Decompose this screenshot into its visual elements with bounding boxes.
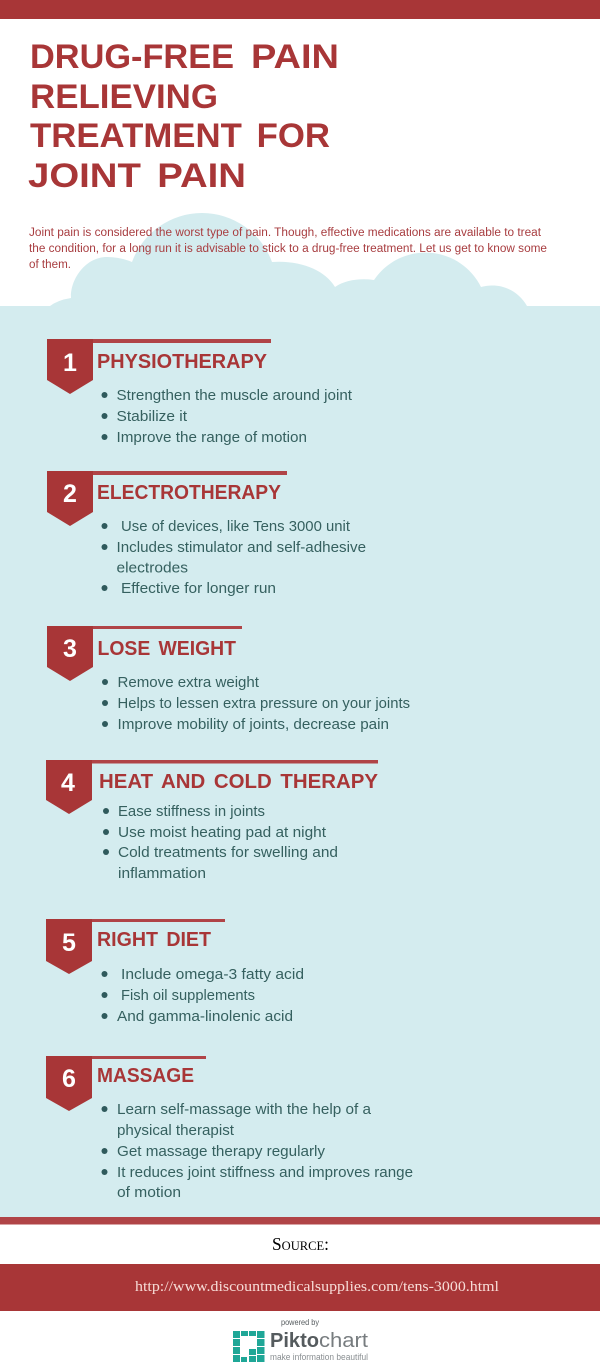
bullet list 4: [103, 803, 338, 882]
source label: Source:: [272, 1234, 329, 1254]
bullet list 4: Ease stiffness in joints: [118, 803, 265, 820]
number ribbon 6: [46, 1056, 92, 1111]
bullet list 2: Use of devices, like Tens 3000 unit: [121, 518, 351, 535]
number ribbon 4: 4: [61, 769, 75, 797]
bullet list 6: Learn self-massage with the help of a: [117, 1101, 372, 1118]
heading: right diet: RIGHT DIET: [97, 928, 211, 951]
bullet list 1: Strengthen the muscle around joint: [116, 387, 353, 404]
number ribbon 5: 5: [62, 929, 76, 957]
panel: 2 electrotherapy: [47, 471, 366, 597]
number ribbon 4: [46, 760, 92, 814]
title: TREATMENT FOR: [30, 117, 330, 155]
bullet list 5: [102, 966, 304, 1025]
bullet list 1: Stabilize it: [116, 408, 188, 425]
number ribbon 5: [46, 919, 92, 974]
piktochart logo: [233, 1318, 368, 1362]
bullet list 3: [102, 674, 410, 733]
bullet list 6: [102, 1101, 413, 1201]
heading: heat and cold therapy: HEAT AND COLD THERAPY: [99, 770, 378, 793]
source url bar: http://www.discountmedicalsupplies.com/tens-3000.html: [135, 1279, 499, 1295]
panel: 5 right diet: [46, 919, 304, 1025]
top banner bar: [0, 0, 600, 19]
bullet list 3: Remove extra weight: [118, 674, 260, 691]
bullet list 4: Use moist heating pad at night: [118, 824, 327, 841]
bullet list 2: [102, 518, 366, 597]
bullet list 6: of motion: [117, 1184, 181, 1201]
title: DRUG-FREE: [30, 38, 234, 76]
panel: 6 massage: [46, 1056, 413, 1201]
number ribbon 2: [47, 471, 93, 526]
heading: electrotherapy: ELECTROTHERAPY: [97, 481, 281, 504]
bullet list 5: Fish oil supplements: [121, 987, 255, 1004]
bullet list 2: Includes stimulator and self-adhesive: [116, 539, 366, 556]
heading: physiotherapy: PHYSIOTHERAPY: [97, 350, 267, 373]
intro text: the condition, for a long run it is advisable to stick to a drug-free treatment. Let us get to know some: [29, 243, 547, 255]
number ribbon 1: 1: [63, 349, 77, 377]
bullet list 1: Improve the range of motion: [116, 429, 307, 446]
piktochart logo: powered by: [281, 1318, 319, 1327]
bullet list 5: And gamma-linolenic acid: [117, 1008, 293, 1025]
panel: 4 heat and cold therapy: [46, 760, 378, 882]
panel: 1 physiotherapy: [47, 339, 353, 446]
title: [28, 38, 339, 195]
title: RELIEVING: [30, 78, 218, 116]
footer band: [0, 1217, 600, 1224]
bullet list 3: Helps to lessen extra pressure on your joints: [118, 695, 410, 712]
number ribbon 3: 3: [63, 635, 77, 663]
bullet list 4: Cold treatments for swelling and: [118, 844, 338, 861]
bullet list 3: Improve mobility of joints, decrease pain: [118, 716, 389, 733]
bullet list 4: inflammation: [118, 865, 206, 882]
intro text: Joint pain is considered the worst type of pain. Though, effective medications are available to treat: [29, 227, 542, 239]
number ribbon 3: [47, 626, 93, 681]
number ribbon 2: 2: [63, 480, 77, 508]
intro text: of them.: [29, 259, 71, 271]
intro text: [29, 227, 547, 271]
bullet list 6: It reduces joint stiffness and improves range: [117, 1164, 413, 1181]
background cloud and panel: [0, 213, 600, 1217]
bullet list 5: Include omega-3 fatty acid: [121, 966, 304, 983]
bullet list 2: Effective for longer run: [121, 580, 276, 597]
icon: piktochart mark: [233, 1331, 264, 1362]
heading: lose weight: LOSE WEIGHT: [98, 637, 236, 660]
panel: 3 lose weight: [47, 626, 410, 733]
title: JOINT PAIN: [28, 157, 246, 195]
bullet list 6: Get massage therapy regularly: [117, 1143, 325, 1160]
number ribbon 6: 6: [62, 1065, 76, 1093]
title: PAIN: [251, 38, 339, 76]
bullet list 2: electrodes: [116, 560, 188, 576]
number ribbon 1: [47, 339, 93, 394]
heading: massage: MASSAGE: [97, 1064, 194, 1087]
piktochart logo: make information beautiful: [270, 1352, 368, 1362]
bullet list 6: physical therapist: [117, 1122, 235, 1139]
bullet list 1: [102, 387, 353, 446]
piktochart logo: Pikto: [270, 1330, 319, 1352]
piktochart logo: chart: [319, 1330, 368, 1352]
source url bar: [0, 1264, 600, 1311]
